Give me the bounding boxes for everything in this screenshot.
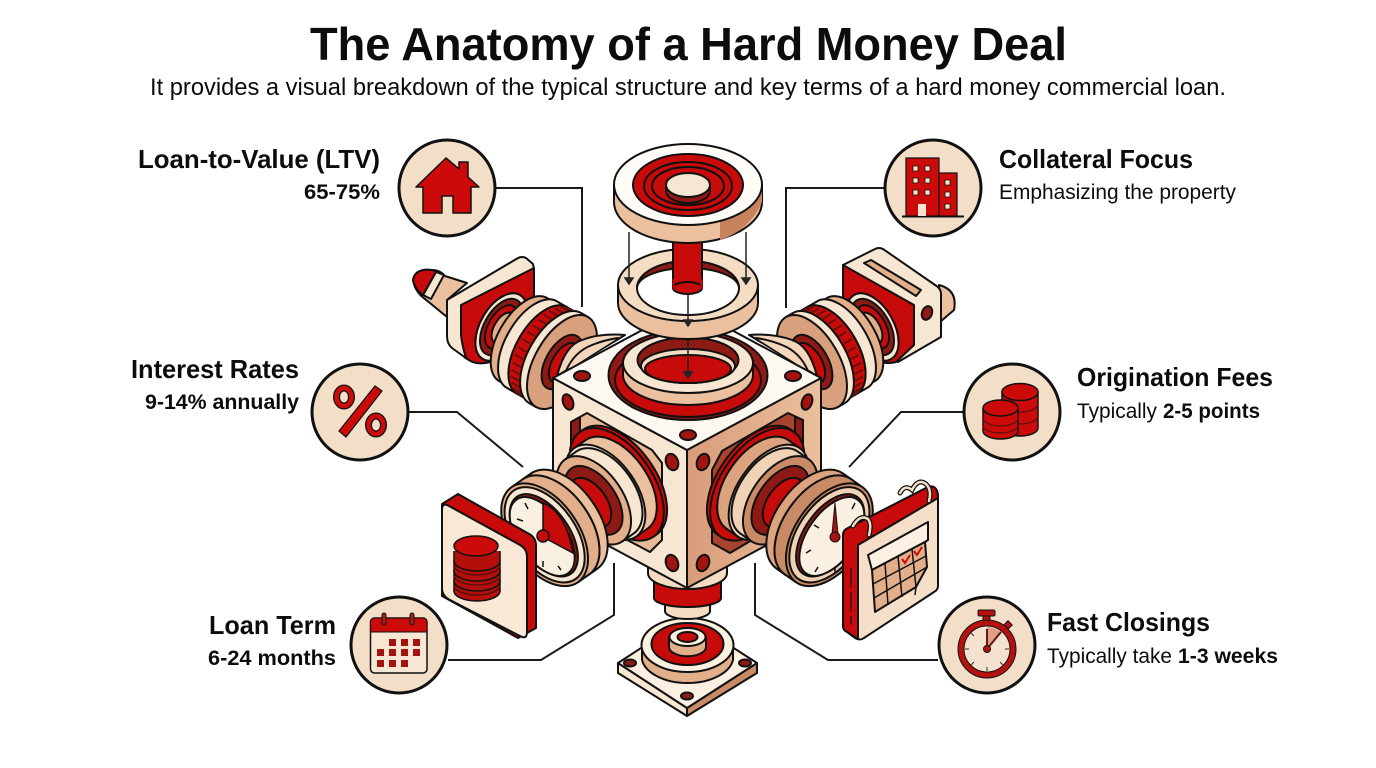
label: origination fees: 2-5 points (1163, 400, 1260, 423)
label: loan term: Loan Term (209, 610, 336, 640)
cube right face (687, 378, 821, 588)
lower neck (648, 555, 727, 619)
label: loan term: 6-24 months (208, 647, 336, 670)
connector: loan-to-value (496, 188, 582, 307)
title: The Anatomy of a Hard Money Deal (310, 18, 1067, 70)
lower left disc stack (480, 409, 686, 607)
cube left port octagon (571, 413, 662, 552)
connector: loan term (448, 563, 614, 660)
cube bolt holes (561, 371, 814, 573)
cube top face (553, 306, 821, 450)
cube left face (553, 378, 687, 588)
label: fast closings: Typically take (1047, 645, 1172, 668)
upper left plate (447, 257, 534, 363)
ring seated in cube (623, 333, 753, 405)
icon: coin stacks (964, 364, 1060, 460)
subtitle: It provides a visual breakdown of the typical structure and key terms of a hard money commercial loan. (150, 74, 1226, 101)
middle ring (618, 249, 758, 339)
label: fast closings: Fast Closings (1047, 607, 1210, 637)
base mount plate (618, 618, 757, 716)
icon: house (399, 140, 495, 236)
upper left disc stack (457, 271, 611, 421)
lower right disc stack (688, 409, 894, 607)
label: interest rates: Interest Rates (131, 354, 299, 384)
coin tile (442, 494, 536, 638)
label: origination fees (1077, 362, 1273, 423)
connector: origination fees (849, 412, 964, 467)
calendar tile (843, 482, 938, 640)
label: loan-to-value: Loan-to-Value (LTV) (138, 144, 380, 174)
upper left arm nose (413, 270, 467, 317)
upper right disc stack (763, 271, 917, 421)
assembly arrows (625, 232, 750, 378)
left gauge dial marks (517, 503, 573, 570)
icon: office building (885, 140, 981, 236)
label: interest rates (131, 354, 299, 414)
label: collateral focus (999, 144, 1236, 204)
icon: percent (312, 364, 408, 460)
right gauge dial marks (806, 503, 855, 573)
upper left arm nose band (423, 272, 444, 299)
label: fast closings (1047, 607, 1278, 668)
upper flanges (557, 335, 817, 376)
label: origination fees: Origination Fees (1077, 362, 1273, 392)
central mechanism: exploded cube assembly (413, 144, 955, 716)
icon: calendar (351, 597, 447, 693)
upper left arm nose tip (413, 270, 436, 295)
icon: stopwatch (939, 597, 1035, 693)
label: interest rates: 9-14% annually (145, 391, 299, 414)
cube top well (608, 330, 768, 420)
label: collateral focus: Collateral Focus (999, 144, 1193, 174)
label: fast closings: 1-3 weeks (1178, 645, 1278, 668)
label: collateral focus: Emphasizing the property (999, 181, 1236, 204)
connector: interest rates (408, 412, 523, 467)
label: loan-to-value: 65-75% (304, 181, 380, 204)
cube right port octagon (712, 413, 803, 553)
cap disc (614, 144, 762, 294)
label: loan-to-value (138, 144, 380, 204)
connector: fast closings (755, 563, 938, 660)
connector: collateral focus (786, 188, 884, 308)
label: origination fees: Typically (1077, 400, 1157, 423)
label: loan term (208, 610, 336, 670)
upper right plate (843, 248, 955, 363)
